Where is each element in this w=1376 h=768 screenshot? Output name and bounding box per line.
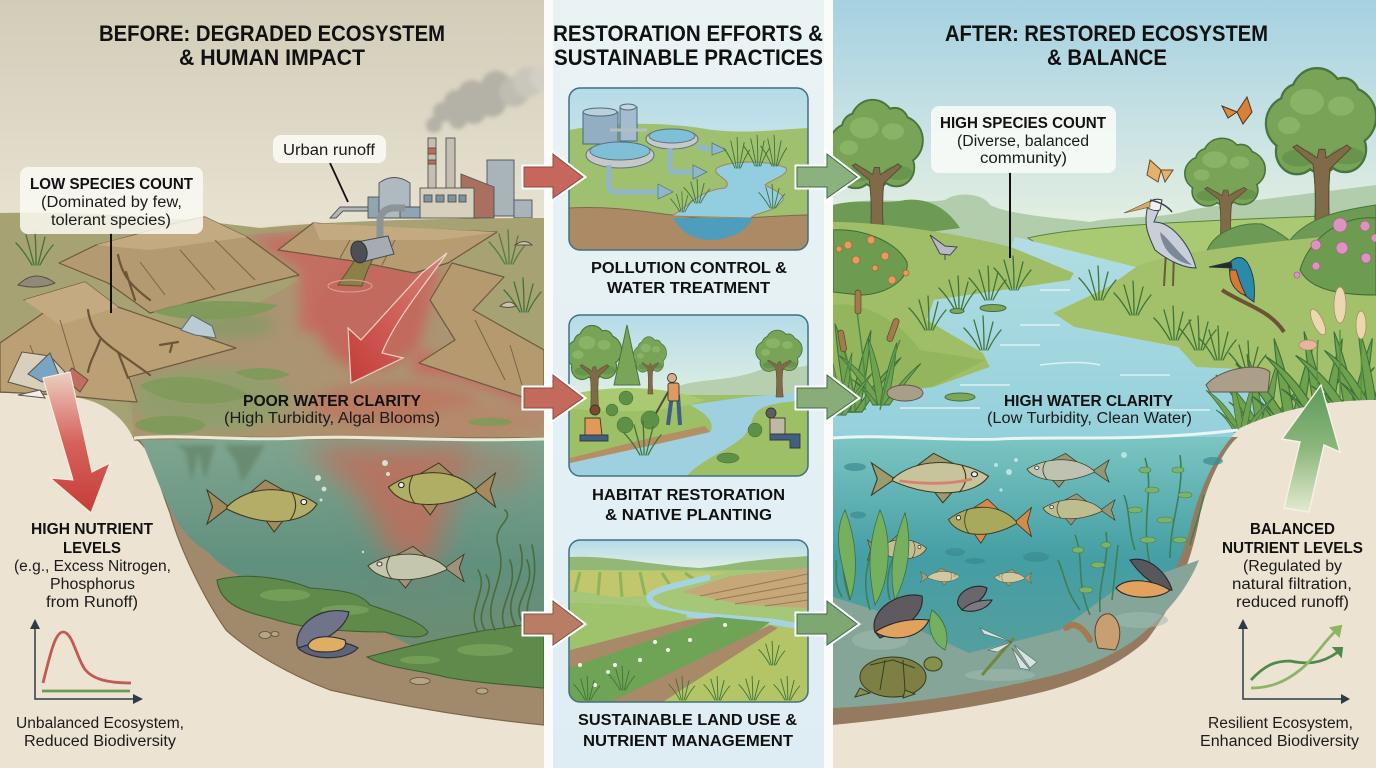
rocks and lily pads [887,304,1270,401]
callout: urban runoff: Urban runoff [283,142,376,159]
aquatic plants [836,455,1204,615]
bubbles [315,460,390,553]
far meadow [1026,216,1314,288]
wave line [833,430,1238,439]
panel: after restored ecosystem [833,0,1376,725]
river surface [833,237,1270,445]
panel: before degraded ecosystem [0,0,554,725]
cattails and reeds [799,256,1376,432]
arrow: green middle [797,375,857,419]
label: high water clarity: HIGH WATER CLARITY [1004,393,1173,410]
label: unbalanced ecosystem: Reduced Biodiversity [24,733,176,750]
card: habitat restoration [566,315,808,476]
seaweed [474,510,535,632]
left heading: & HUMAN IMPACT [179,45,366,70]
underwater basin [134,437,544,725]
flowering bushes [833,218,1376,295]
bubbles [994,452,1127,492]
butterfly: orange [1222,97,1252,124]
label: poor water clarity [224,393,440,427]
fish: trout large [872,453,988,503]
label: unbalanced ecosystem [16,715,184,750]
callout: low species count: tolerant species) [51,212,171,229]
label: balanced nutrient levels: (Regulated by [1243,558,1342,575]
bird: heron [1124,199,1196,286]
fish silhouettes [844,457,1223,564]
label: high nutrient levels [14,521,171,611]
plastic bag on bank [181,315,216,338]
arrow: pollution flow into river [348,253,447,383]
butterfly: pale [1147,160,1173,182]
paper cut and soil [1230,400,1376,445]
left bank [833,222,1074,405]
callout: urban runoff [273,135,386,202]
label: resilient ecosystem: Resilient Ecosystem, [1208,715,1353,732]
label: unbalanced ecosystem: Unbalanced Ecosystem, [16,715,184,732]
smoke [426,66,554,133]
label: balanced nutrient levels [1222,521,1363,611]
callout: high species count [931,106,1116,258]
fish: carp right [388,463,496,515]
label: balanced nutrient levels: NUTRIENT LEVELS [1222,540,1363,557]
label: sustainable land use: NUTRIENT MANAGEMENT [583,733,793,750]
arrow: red middle [524,375,583,419]
label: habitat restoration: HABITAT RESTORATION [592,487,785,504]
dead roots [88,255,178,378]
distant shrubs [833,200,960,232]
tufts and rocks [16,230,541,312]
label: poor water clarity: POOR WATER CLARITY [243,393,421,410]
label: high water clarity [987,393,1192,427]
label: pollution control: WATER TREATMENT [607,280,770,297]
arrow: green bottom [797,601,857,645]
chart: unbalanced [30,619,143,704]
eroded banks [0,217,544,404]
callout: low species count [20,167,203,313]
discharge pipe [328,208,405,292]
callout: low species count: (Dominated by few, [41,194,182,211]
arrow: green top [797,154,857,198]
chart: resilient [1238,619,1350,704]
far hills [833,185,1376,260]
left stripes [569,570,730,598]
right heading [945,21,1268,70]
mussel [297,611,358,658]
left heading [99,21,445,70]
trash pile [8,352,88,398]
label: high nutrient levels: from Runoff) [46,594,138,611]
callout: high species count: (Diverse, balanced [957,133,1089,150]
right heading: AFTER: RESTORED ECOSYSTEM [945,21,1268,46]
label: balanced nutrient levels: BALANCED [1250,521,1335,538]
right bank [1053,237,1376,410]
arrow: nutrients up [1282,385,1340,512]
arrow: brown bottom [524,601,583,645]
fish: minnows [920,568,1032,586]
trees [829,68,1376,248]
fish: perch [948,499,1032,543]
panel: restoration column [544,0,833,768]
trees [566,326,622,413]
label: habitat restoration: & NATIVE PLANTING [605,507,772,524]
pond [672,162,787,218]
callout: high species count: HIGH SPECIES COUNT [940,115,1106,132]
label: resilient ecosystem: Enhanced Biodiversity [1200,733,1359,750]
stream [650,577,808,628]
label: high nutrient levels: Phosphorus [50,576,135,593]
label: pollution control: POLLUTION CONTROL & [591,260,787,277]
callout: high species count: community) [980,150,1067,167]
centre heading [553,21,823,70]
hanging algae [175,445,265,482]
lake floor rocks [833,560,1199,708]
label: sustainable land use [578,712,797,750]
arrow: nutrients down [43,372,110,513]
label: poor water clarity: (High Turbidity, Algal Blooms) [224,410,440,427]
moss mats [217,576,544,688]
label: resilient ecosystem [1200,715,1359,750]
fish: carp left [207,480,317,532]
underwater [833,437,1238,725]
label: high nutrient levels: HIGH NUTRIENT [31,521,153,538]
factory [330,138,532,218]
fish: silver [368,546,464,588]
dragonfly [980,628,1037,675]
label: pollution control [591,260,787,297]
card: sustainable land use [569,540,808,702]
treatment tanks [583,104,637,144]
pebbles [259,632,488,694]
left heading: BEFORE: DEGRADED ECOSYSTEM [99,21,445,46]
wave line [134,437,544,440]
worm and shell [1066,614,1120,650]
label: high nutrient levels: (e.g., Excess Nitrogen, [14,558,171,575]
label: high water clarity: (Low Turbidity, Clean Water) [987,410,1192,427]
small bird [930,235,957,260]
label: sustainable land use: SUSTAINABLE LAND USE & [578,712,797,729]
field and strips [569,603,687,650]
flow pipes [609,147,716,192]
arrow: red top [524,154,583,198]
card: pollution control [569,88,808,250]
label: balanced nutrient levels: natural filtration, [1232,576,1352,593]
centre heading: SUSTAINABLE PRACTICES [554,45,823,70]
fish: small [868,534,926,565]
fish: trout lower [1043,494,1115,525]
polluted river [130,228,550,441]
planters [580,374,800,448]
callout: low species count: LOW SPECIES COUNT [30,176,193,193]
river [570,392,808,476]
right heading: & BALANCE [1047,45,1167,70]
label: balanced nutrient levels: reduced runoff) [1236,594,1349,611]
fish: trout upper right [1027,453,1109,487]
kingfisher [1209,258,1284,332]
label: habitat restoration [592,487,785,524]
mid shrubs [1206,204,1376,250]
mussels [874,559,1172,638]
right brown field [682,568,808,608]
turtle [855,657,942,698]
centre heading: RESTORATION EFFORTS & [553,21,823,46]
algae patches surface [135,301,512,434]
label: high nutrient levels: LEVELS [63,540,121,557]
